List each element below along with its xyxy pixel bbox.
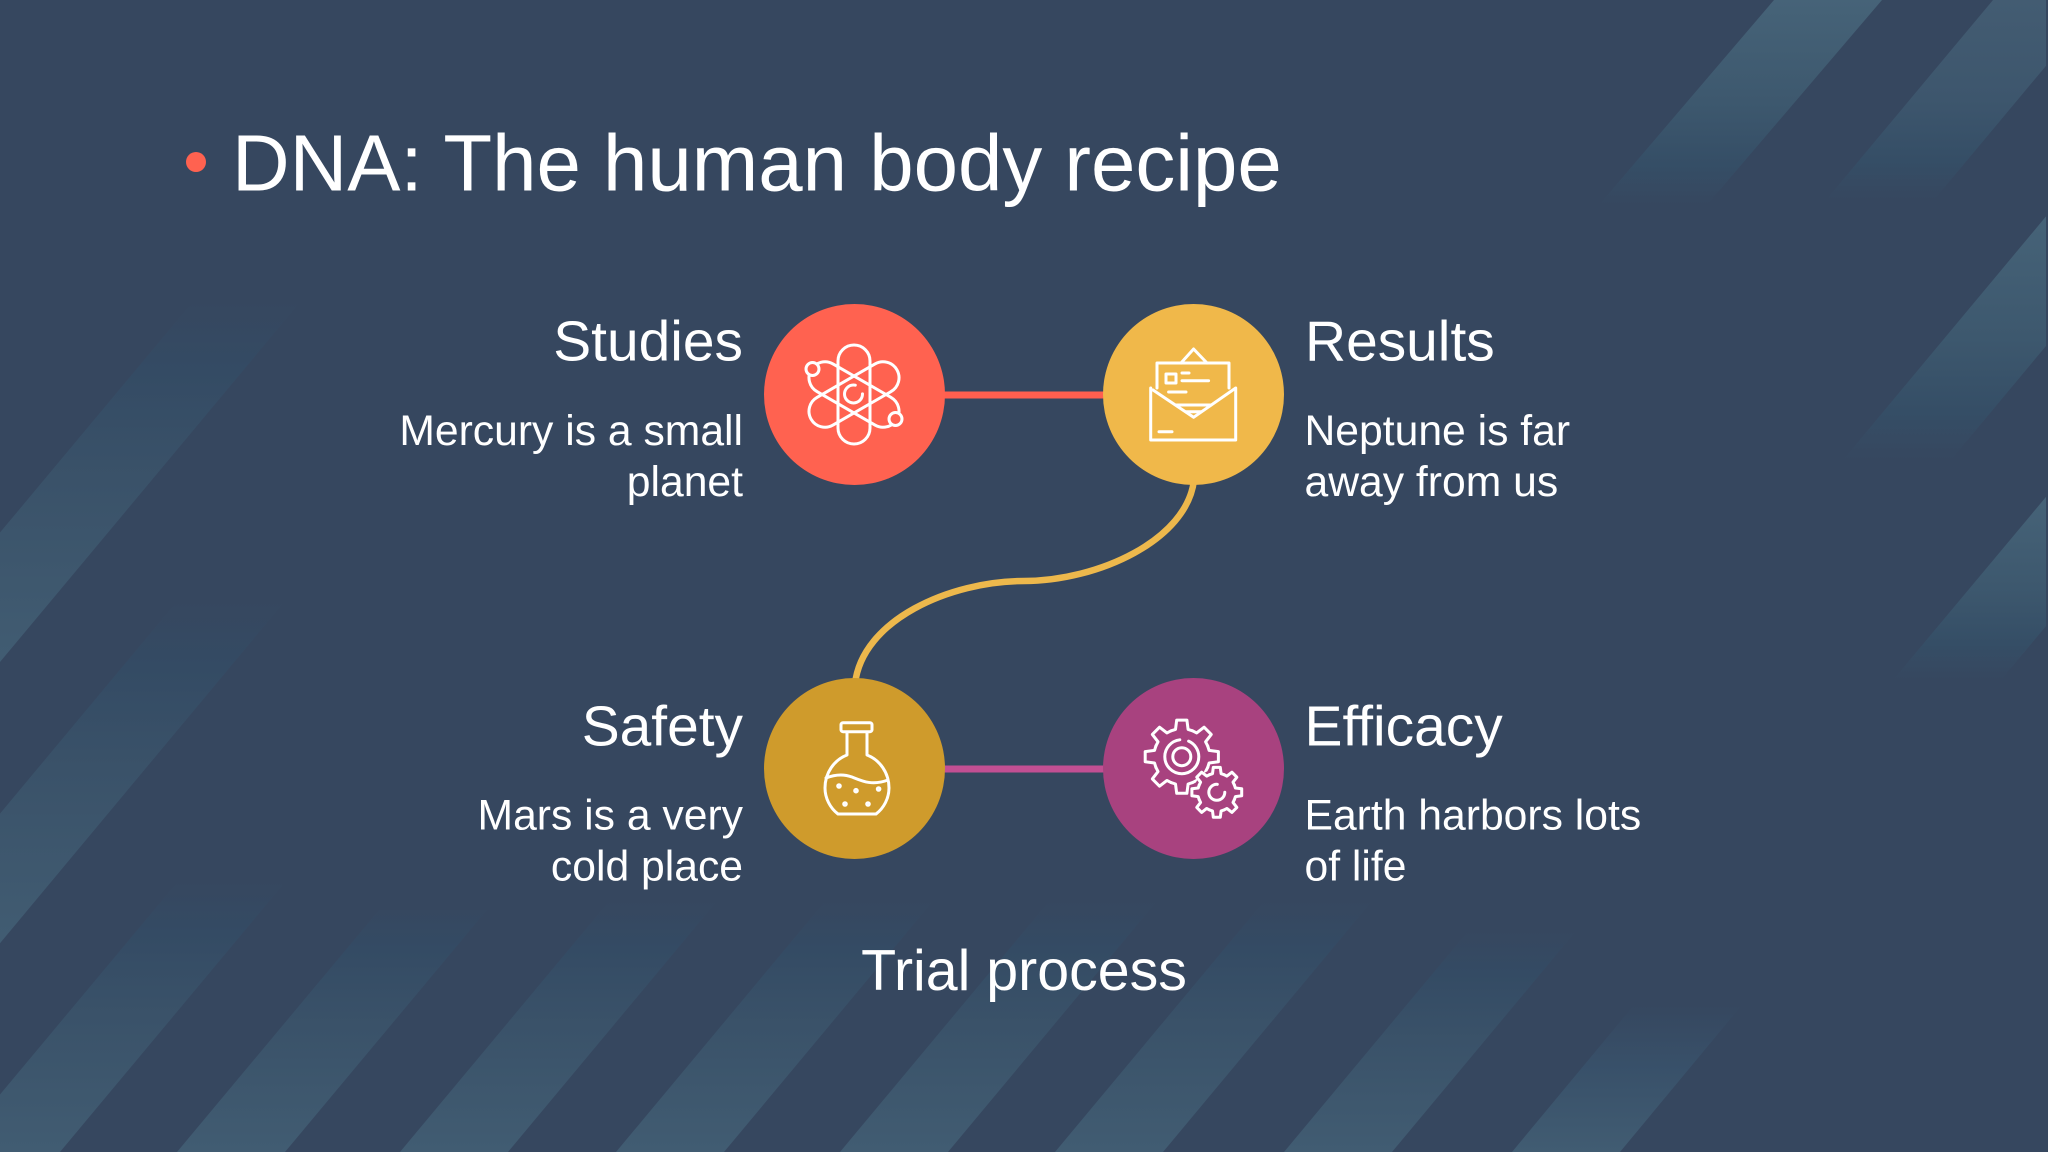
studies description: Mercury is a small bbox=[399, 407, 743, 455]
efficacy circle bbox=[1103, 678, 1284, 859]
connector: results to safety bbox=[855, 480, 1194, 684]
results circle bbox=[1103, 304, 1284, 485]
step: studies bbox=[399, 304, 945, 506]
studies circle bbox=[764, 304, 945, 485]
step: results bbox=[1103, 304, 1570, 506]
safety description: Mars is a very bbox=[478, 792, 744, 840]
title text: DNA: The human body recipe bbox=[232, 118, 1282, 208]
step: safety bbox=[478, 678, 945, 890]
safety description: cold place bbox=[551, 842, 743, 890]
diagram caption: Trial process bbox=[861, 939, 1187, 1003]
icon: gears bbox=[1145, 720, 1242, 817]
efficacy heading: Efficacy bbox=[1304, 694, 1503, 758]
studies description: planet bbox=[627, 458, 743, 506]
connector: safety to efficacy bbox=[940, 766, 1110, 772]
studies heading: Studies bbox=[553, 310, 743, 374]
title bullet bbox=[186, 152, 206, 172]
efficacy description: of life bbox=[1304, 842, 1406, 890]
title bbox=[186, 118, 1282, 208]
results heading: Results bbox=[1305, 310, 1495, 374]
icon: flask bbox=[825, 723, 889, 814]
safety circle bbox=[764, 678, 945, 859]
step: efficacy bbox=[1103, 678, 1641, 890]
results description: Neptune is far bbox=[1304, 407, 1570, 455]
icon: envelope bbox=[1151, 349, 1236, 440]
connector: studies to results bbox=[940, 392, 1110, 398]
results description: away from us bbox=[1304, 458, 1558, 506]
efficacy description: Earth harbors lots bbox=[1304, 792, 1641, 840]
icon: atom bbox=[803, 345, 905, 444]
safety heading: Safety bbox=[582, 694, 744, 758]
